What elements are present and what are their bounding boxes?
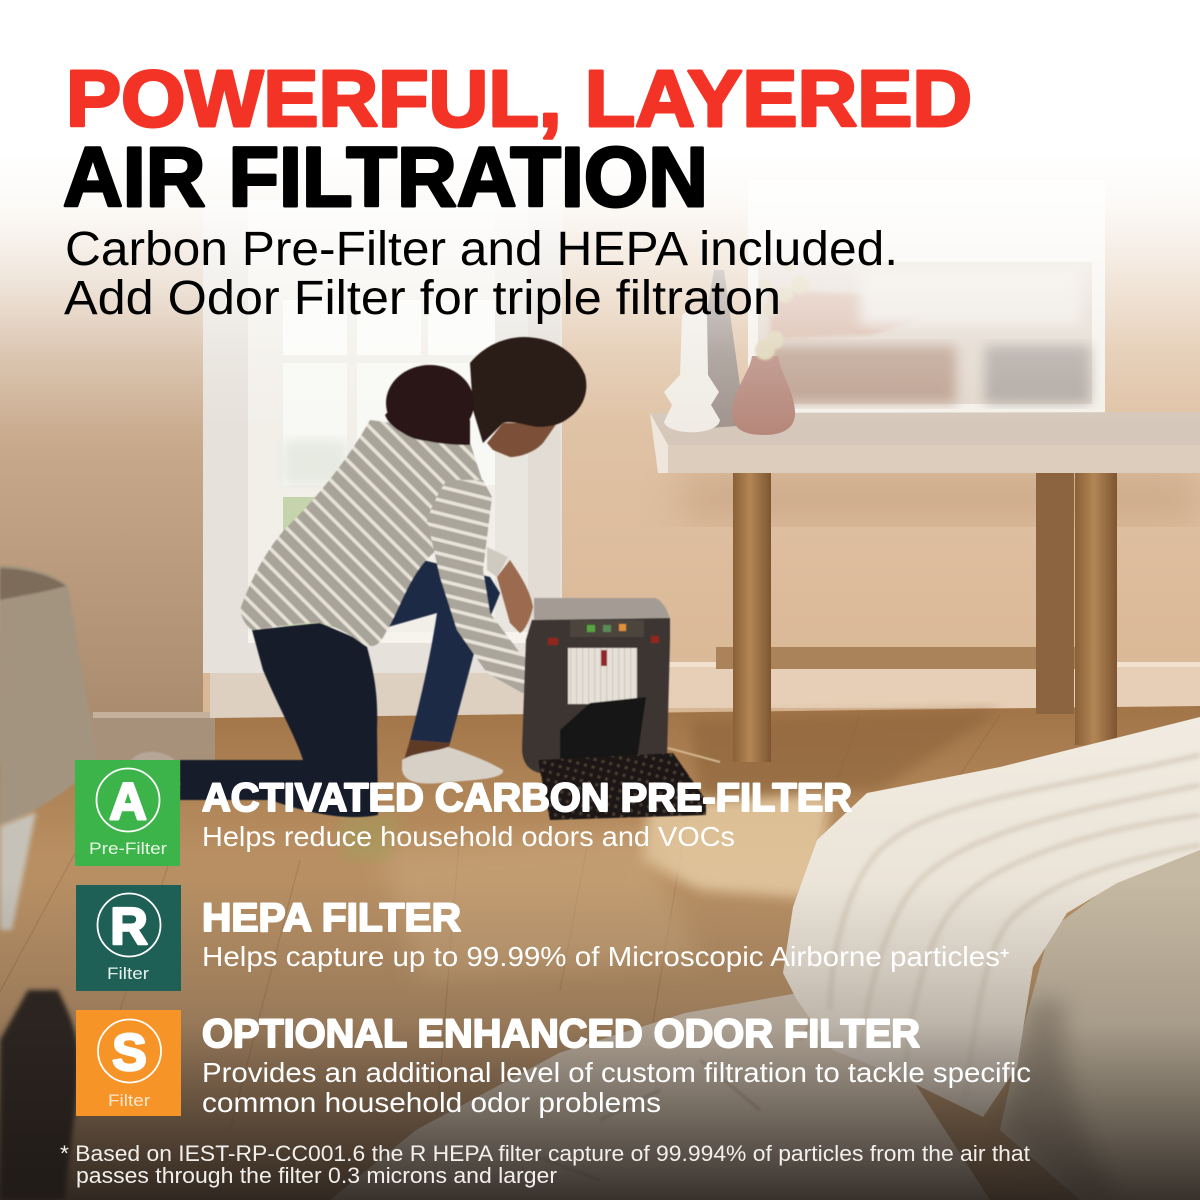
badge: odor filter: S <box>112 1024 147 1082</box>
front leg jeans <box>388 560 500 743</box>
bed <box>1000 840 1200 1200</box>
feature: activated carbon pre-filter: ACTIVATED CARBON PRE-FILTER <box>202 776 852 820</box>
hair <box>470 337 586 443</box>
back leg jeans <box>180 623 378 817</box>
bottom darkening <box>0 880 1200 1200</box>
badge: activated carbon pre-filter: Pre-Filter <box>89 840 168 858</box>
badge: HEPA filter: R <box>110 898 148 956</box>
vases and dried flowers <box>664 259 809 435</box>
left wall <box>0 200 203 730</box>
feature: optional enhanced odor filter: Provides an additional level of custom filtration to tackle specific <box>202 1057 1031 1088</box>
subtitle: Carbon Pre-Filter and HEPA included. <box>65 223 898 276</box>
feature: HEPA filter: HEPA FILTER <box>202 896 461 940</box>
badge: HEPA filter <box>76 885 181 991</box>
ponytail <box>386 365 474 441</box>
badge: activated carbon pre-filter: A <box>109 773 147 831</box>
near hand <box>540 680 590 720</box>
power cord <box>668 748 720 762</box>
far sleeve <box>487 547 508 577</box>
subtitle: Add Odor Filter for triple filtraton <box>64 272 781 325</box>
woman <box>131 337 590 817</box>
feature: HEPA filter: + <box>1000 945 1009 962</box>
feature: HEPA filter <box>202 896 1009 972</box>
footnote <box>60 1141 1030 1188</box>
feature: optional enhanced odor filter <box>202 1012 1031 1118</box>
title line 1: POWERFUL, LAYERED <box>66 54 972 143</box>
badge: odor filter: Filter <box>108 1092 151 1110</box>
footnote: * Based on IEST-RP-CC001.6 the R HEPA filter capture of 99.994% of particles from the air that <box>60 1141 1030 1166</box>
face <box>487 423 557 457</box>
sock <box>402 747 503 784</box>
window <box>203 200 562 673</box>
throw blanket <box>783 717 1200 1117</box>
shadow beneath console table <box>680 472 1200 522</box>
floor <box>0 706 1200 1200</box>
badge: activated carbon pre-filter <box>75 760 180 866</box>
painting <box>748 180 1105 418</box>
feature: optional enhanced odor filter: OPTIONAL ENHANCED ODOR FILTER <box>202 1012 920 1056</box>
baseboards <box>0 662 1200 762</box>
feature: activated carbon pre-filter: Helps reduce household odors and VOCs <box>202 821 735 852</box>
near sleeve <box>427 480 555 703</box>
console table <box>650 412 1200 762</box>
feature: activated carbon pre-filter <box>202 776 852 852</box>
title <box>63 54 972 224</box>
ankle <box>404 740 450 760</box>
top white fade <box>0 0 1200 430</box>
rug <box>330 987 990 1200</box>
feature: HEPA filter: Helps capture up to 99.99% of Microscopic Airborne particles <box>202 941 1000 972</box>
feature: optional enhanced odor filter: common household odor problems <box>202 1087 661 1118</box>
badge: odor filter <box>76 1010 181 1116</box>
far hand <box>497 560 533 633</box>
footnote: passes through the filter 0.3 microns and larger <box>76 1163 557 1188</box>
lamp <box>0 565 97 826</box>
dark vase foreground <box>0 990 78 1200</box>
blurred foreground plant stems <box>0 812 36 930</box>
subtitle <box>64 223 898 325</box>
badge: HEPA filter: Filter <box>107 965 150 983</box>
sweater torso <box>240 420 483 646</box>
air purifier <box>522 598 720 820</box>
back foot sock <box>131 752 180 785</box>
bed fold shadow <box>1000 1000 1120 1200</box>
title line 2: AIR FILTRATION <box>63 130 708 224</box>
